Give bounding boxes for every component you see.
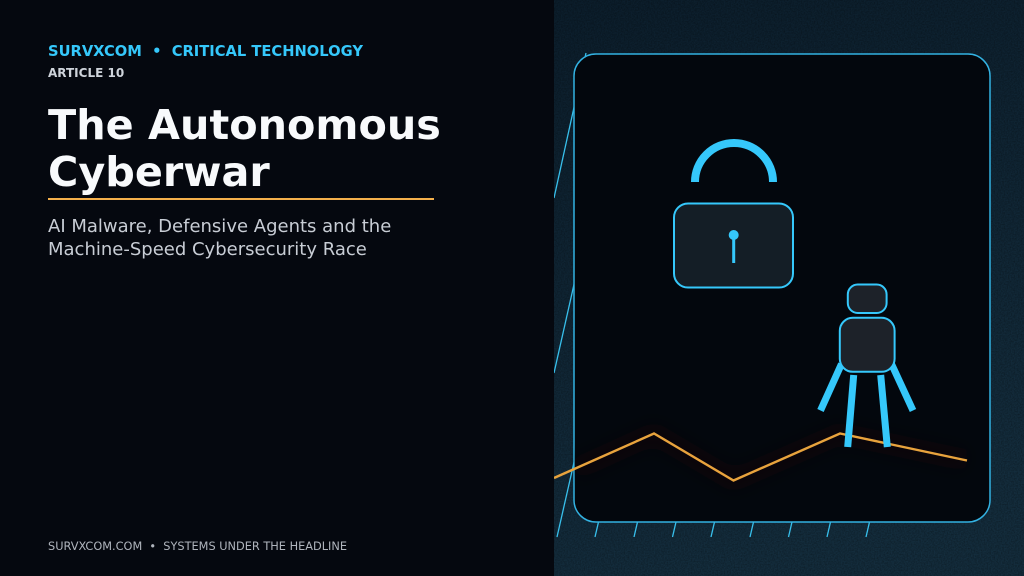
illustration: right panel — [554, 0, 1024, 576]
icon: robot agent — [820, 284, 913, 447]
robot body — [840, 318, 895, 372]
title: The Autonomous Cyberwar — [48, 101, 441, 196]
icon: padlock — [674, 143, 793, 288]
panel: left text background — [0, 0, 554, 576]
padlock body — [674, 204, 793, 288]
chart line: threat pulse — [554, 434, 967, 480]
article label: ARTICLE 10 — [48, 66, 124, 80]
diagonal circuit lines — [554, 53, 870, 537]
footer: SURVXCOM.COM • SYSTEMS UNDER THE HEADLINE — [48, 539, 347, 553]
title underline — [48, 198, 434, 200]
keyhole — [729, 230, 739, 263]
robot limbs — [820, 364, 913, 447]
background gradient — [554, 0, 1024, 576]
subtitle: AI Malware, Defensive Agents and the Machine-Speed Cybersecurity Race — [48, 216, 391, 260]
central dark card — [574, 54, 990, 522]
padlock shackle — [695, 143, 773, 182]
eyebrow: SURVXCOM • CRITICAL TECHNOLOGY — [48, 43, 363, 60]
robot head — [848, 284, 887, 313]
